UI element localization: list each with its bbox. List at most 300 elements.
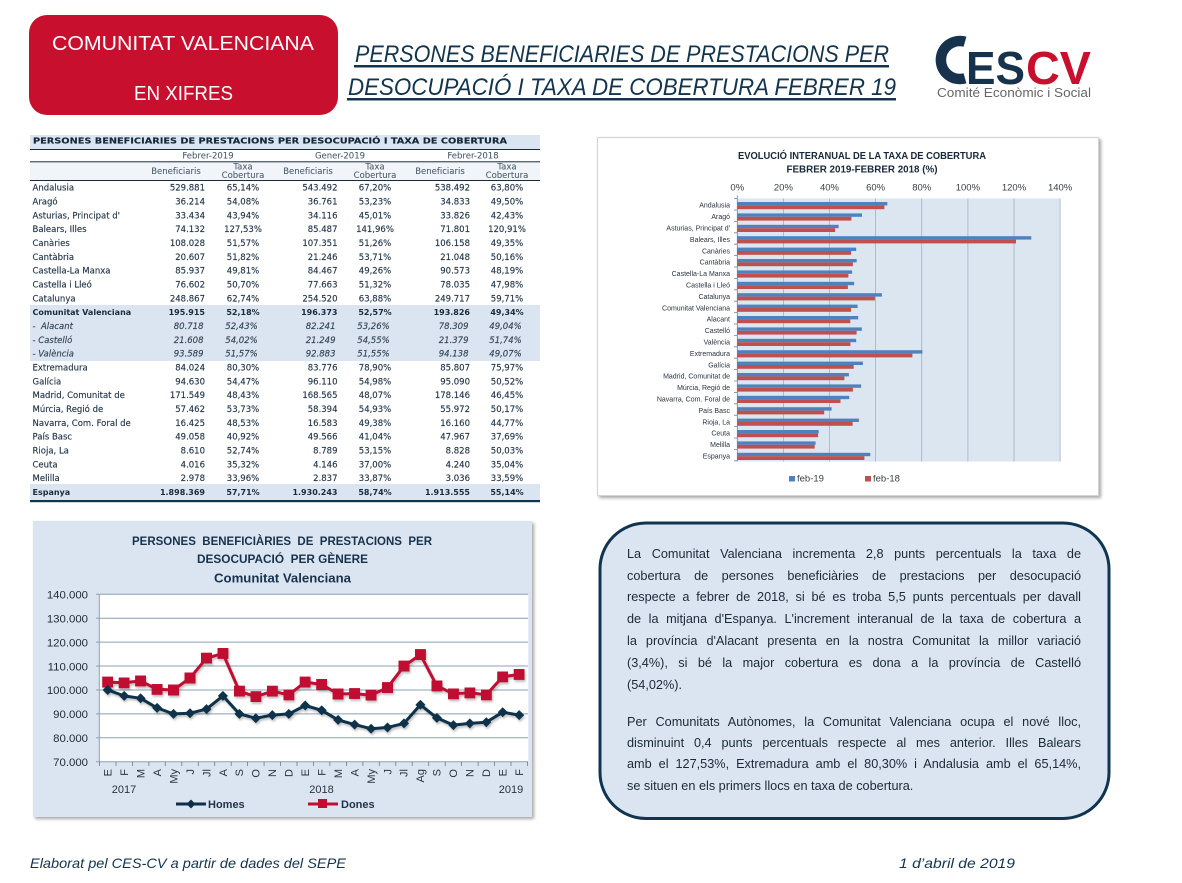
row: Rioja: 52,74% xyxy=(227,446,259,456)
row: Castella i Lleó xyxy=(32,280,523,290)
row: Castella-La Manxa: 90.573 xyxy=(440,267,470,277)
logo: CESCV: ES xyxy=(966,42,1025,94)
row: València: 92.883 xyxy=(306,350,336,360)
month labels: F xyxy=(119,769,131,776)
row: Ceuta: 4.016 xyxy=(181,460,205,470)
row: Asturias: Asturias, Principat d' xyxy=(32,211,120,221)
row: Comunitat Valenciana: 52,57% xyxy=(358,308,392,317)
row: Andalusia: 543.492 xyxy=(302,184,338,194)
table column headers: Taxa xyxy=(496,162,517,172)
row: Canàries: 51,26% xyxy=(359,239,391,249)
row: Canàries: 49,35% xyxy=(491,239,523,249)
paragraph 2: disminuint 0,4 punts percentuals respecte al mes anterior. Illes Balears xyxy=(627,736,1081,750)
row: Alacant xyxy=(32,322,522,332)
logo: CESCV xyxy=(937,41,1091,100)
row: Espanya xyxy=(32,488,524,497)
row: Cantàbria: Cantàbria xyxy=(32,253,74,263)
y axis labels: 100.000 xyxy=(47,685,88,697)
row: Melilla: 2.837 xyxy=(313,474,338,484)
year labels xyxy=(112,784,523,796)
row: País Basc: 40,92% xyxy=(227,433,259,443)
month labels: A xyxy=(152,768,164,776)
table column headers: Cobertura xyxy=(354,171,396,181)
row: Rioja: Rioja, La xyxy=(32,446,69,456)
row: País Basc: 37,69% xyxy=(491,433,523,443)
row: Múrcia: 50,17% xyxy=(491,405,523,415)
row: Galícia: Galícia xyxy=(32,377,61,387)
row: Navarra: 48,53% xyxy=(227,419,259,429)
panel: commentary background xyxy=(600,523,1109,818)
table column headers: Beneficiaris xyxy=(415,167,465,177)
row: Aragó xyxy=(32,196,523,208)
row: Ceuta xyxy=(32,460,523,470)
month labels: D xyxy=(284,769,296,777)
main title xyxy=(347,41,896,101)
row: Aragó: 54,08% xyxy=(227,198,259,208)
row: Navarra: Navarra, Com. Foral de xyxy=(32,419,131,429)
percent axis labels: 80% xyxy=(912,182,932,194)
row: València: 49,07% xyxy=(489,350,522,360)
region labels: Espanya xyxy=(703,454,730,460)
table bottom rule xyxy=(30,500,540,502)
row: Rioja: 53,15% xyxy=(359,446,391,456)
paragraph 1: (54,02%). xyxy=(627,678,682,692)
footer: source: Elaborat pel CES-CV a partir de dades del SEPE xyxy=(30,855,347,871)
region labels xyxy=(657,203,730,460)
row: Castella i Lleó: 51,32% xyxy=(359,280,391,290)
highlight band: Comunitat Valenciana xyxy=(30,305,540,361)
month labels: N xyxy=(464,769,476,777)
row: Castella i Lleó: Castella i Lleó xyxy=(32,280,92,290)
row: Balears: 141,96% xyxy=(356,225,394,235)
row: Castelló: 21.608 xyxy=(174,336,204,346)
row: Múrcia: 58.394 xyxy=(308,405,338,415)
row: Canàries xyxy=(32,239,523,249)
month labels: Jl xyxy=(398,769,410,777)
row: València: 51,57% xyxy=(225,350,258,360)
percent axis labels xyxy=(730,182,1073,194)
month labels: J xyxy=(185,769,197,774)
row: Castella i Lleó: 77.663 xyxy=(308,280,338,290)
row: Castella-La Manxa xyxy=(32,267,523,277)
row: Madrid: 171.549 xyxy=(170,391,205,401)
row: Múrcia: 57.462 xyxy=(175,405,205,415)
paragraph 1: la província d'Alacant presenta en la nostra Comunitat la millor variació xyxy=(627,634,1081,648)
row: Andalusia: 529.881 xyxy=(170,184,205,194)
row: Andalusia: 538.492 xyxy=(435,184,470,194)
month labels: A xyxy=(218,768,230,776)
row: Madrid: 46,45% xyxy=(491,391,523,401)
paragraph 1 xyxy=(627,547,1082,692)
table column headers: Taxa xyxy=(364,162,385,172)
row: Rioja: 8.789 xyxy=(313,446,338,456)
month labels xyxy=(102,768,526,784)
row: Aragó: 34.833 xyxy=(440,198,470,208)
row: Madrid: 48,07% xyxy=(359,391,391,401)
row: País Basc xyxy=(32,433,523,443)
highlight band: Espanya xyxy=(30,484,540,500)
region labels: Aragó xyxy=(711,214,730,221)
badge: Comunitat Valenciana en xifres: COMUNITAT VALENCIANA xyxy=(52,32,314,55)
row: Andalusia: 63,80% xyxy=(491,184,523,194)
row: Canàries: 51,57% xyxy=(227,239,259,249)
percent axis labels: 20% xyxy=(774,182,793,194)
row: Aragó: 36.214 xyxy=(175,198,205,208)
row: Ceuta: Ceuta xyxy=(32,460,58,470)
row: Madrid: Madrid, Comunitat de xyxy=(32,391,125,401)
row: Catalunya: 249.717 xyxy=(435,294,470,304)
table column headers xyxy=(30,149,540,181)
row: Andalusia xyxy=(32,184,523,194)
row: Extremadura: 83.776 xyxy=(308,364,338,374)
table column headers: Taxa xyxy=(232,162,253,172)
table column headers: Febrer-2018 xyxy=(447,152,499,162)
logo: CESCV: CV xyxy=(1026,42,1091,94)
region labels: Asturias, Principat d' xyxy=(666,226,730,232)
row: València: - València xyxy=(32,349,74,360)
row: Extremadura: 75,97% xyxy=(491,364,523,374)
row: Castella-La Manxa: Castella-La Manxa xyxy=(32,267,110,277)
row: Ceuta: 35,32% xyxy=(227,460,259,470)
row: Asturias: 34.116 xyxy=(308,211,338,221)
row: Canàries: 108.028 xyxy=(170,239,205,249)
row: Navarra: 16.425 xyxy=(175,419,205,429)
table title band xyxy=(30,134,540,149)
row: Castelló: 51,74% xyxy=(489,336,522,346)
row: Cantàbria: 51,82% xyxy=(227,253,259,263)
paragraph 1: de la mitjana d'Espanya. L'increment interanual de la taxa de cobertura a xyxy=(627,612,1081,626)
line chart legend: Homes xyxy=(208,799,245,811)
row: Castella-La Manxa: 84.467 xyxy=(308,267,338,277)
row: Navarra: 49,38% xyxy=(359,419,391,429)
row: Comunitat Valenciana: 193.826 xyxy=(434,308,470,317)
row: Asturias: 42,43% xyxy=(491,211,523,221)
line chart title: DESOCUPACIÓ PER GÈNERE xyxy=(197,551,368,566)
region labels: Múrcia, Regió de xyxy=(677,385,730,392)
region labels: Castelló xyxy=(705,328,730,335)
row: Galícia: 54,98% xyxy=(359,377,391,387)
row: Ceuta: 37,00% xyxy=(359,460,391,470)
main title: DESOCUPACIÓ I TAXA DE COBERTURA FEBRER 19 xyxy=(348,74,896,101)
month labels: Jl xyxy=(202,769,214,777)
row: Navarra: 16.160 xyxy=(440,419,470,429)
row: Cantàbria: 20.607 xyxy=(175,253,205,263)
region labels: València xyxy=(704,340,730,346)
row: Madrid: 178.146 xyxy=(435,391,470,401)
row: Espanya: 57,71% xyxy=(226,488,260,497)
row: Melilla: 2.978 xyxy=(181,474,205,484)
row: Castella-La Manxa: 49,26% xyxy=(359,267,391,277)
panel: line chart by gender xyxy=(33,521,532,817)
row: País Basc: 41,04% xyxy=(359,433,391,443)
region labels: Balears, Illes xyxy=(690,237,730,244)
year labels: 2017 xyxy=(112,784,136,796)
table column headers: Beneficiaris xyxy=(283,167,333,177)
month labels: Ag xyxy=(415,769,427,782)
row: Andalusia: Andalusia xyxy=(32,184,74,194)
row: Alacant: 82.241 xyxy=(306,322,336,332)
row: Castelló xyxy=(32,335,522,346)
row: Alacant: 80.718 xyxy=(174,322,204,332)
month labels: E xyxy=(102,769,114,776)
paragraph 2: se situen en els primers llocs en taxa de cobertura. xyxy=(627,779,913,793)
percent axis labels: 60% xyxy=(866,182,886,194)
row: Navarra: 44,77% xyxy=(491,419,523,429)
row: Navarra: 16.583 xyxy=(308,419,338,429)
row: Balears: 74.132 xyxy=(175,225,205,235)
table column headers: Beneficiaris xyxy=(151,167,201,177)
row: Catalunya: 63,88% xyxy=(359,294,391,304)
month labels: O xyxy=(250,769,262,778)
row: Catalunya xyxy=(32,294,523,304)
line chart title: PERSONES BENEFICIÀRIES DE PRESTACIONS PER xyxy=(132,533,432,548)
region labels: Rioja, La xyxy=(702,419,730,426)
month labels: D xyxy=(481,769,493,777)
y axis labels: 130.000 xyxy=(47,614,88,626)
region labels: Madrid, Comunitat de xyxy=(663,374,730,381)
line chart title xyxy=(132,533,432,586)
row: Catalunya: 59,71% xyxy=(491,294,523,304)
row: Galícia: 50,52% xyxy=(491,377,523,387)
row: Galícia: 95.090 xyxy=(440,377,470,387)
bar chart legend: feb-19 xyxy=(797,474,824,484)
percent axis labels: 120% xyxy=(1002,182,1027,194)
row: Balears: Balears, Illes xyxy=(32,225,87,235)
month labels: My xyxy=(168,769,180,784)
row: Comunitat Valenciana xyxy=(32,308,524,317)
row: Catalunya: Catalunya xyxy=(32,294,76,304)
y axis labels: 120.000 xyxy=(47,638,88,650)
row: Ceuta: 4.146 xyxy=(313,460,338,470)
percent axis labels: 140% xyxy=(1048,182,1073,194)
row: Asturias: 45,01% xyxy=(359,211,391,221)
row: Comunitat Valenciana: 195.915 xyxy=(169,308,205,317)
row: Castella-La Manxa: 49,81% xyxy=(227,267,259,277)
row: Asturias: 33.434 xyxy=(175,211,205,221)
row: Rioja: 8.828 xyxy=(446,446,470,456)
row: Navarra xyxy=(32,419,523,429)
month labels: M xyxy=(333,769,345,778)
row: Comunitat Valenciana: 52,18% xyxy=(226,308,260,317)
month labels: E xyxy=(300,769,312,776)
row: Extremadura: 84.024 xyxy=(175,364,205,374)
row: Melilla: 33,87% xyxy=(359,474,391,484)
row: Cantàbria: 21.246 xyxy=(308,253,338,263)
row: Balears: 127,53% xyxy=(224,225,262,235)
row: Canàries: 106.158 xyxy=(435,239,470,249)
main title: PERSONES BENEFICIARIES DE PRESTACIONS PER xyxy=(355,41,889,68)
month labels: N xyxy=(267,769,279,777)
row: País Basc: 49.566 xyxy=(308,433,338,443)
row: Espanya: 1.913.555 xyxy=(425,488,470,497)
table column headers: Febrer-2019 xyxy=(182,152,234,162)
month labels: S xyxy=(234,769,246,776)
row: Extremadura: 80,30% xyxy=(227,364,259,374)
row: Cantàbria: 53,71% xyxy=(359,253,391,263)
region labels: País Basc xyxy=(698,408,730,415)
row: Aragó: 49,50% xyxy=(491,198,523,208)
row: Castelló: 21.379 xyxy=(439,336,468,346)
region labels: Castella-La Manxa xyxy=(672,271,730,278)
row: Castella i Lleó: 76.602 xyxy=(175,280,205,290)
row: València: 51,55% xyxy=(357,350,390,360)
row: Extremadura xyxy=(32,364,523,374)
row: Rioja: 50,03% xyxy=(491,446,523,456)
plot background and grid xyxy=(734,196,1060,462)
row: Castella-La Manxa: 85.937 xyxy=(175,267,205,277)
row: Melilla xyxy=(32,474,523,484)
row: Balears: 120,91% xyxy=(488,225,526,235)
region labels: Comunitat Valenciana xyxy=(662,305,730,312)
row: Espanya: 1.930.243 xyxy=(292,488,338,497)
region labels: Extremadura xyxy=(690,351,730,358)
region labels: Navarra, Com. Foral de xyxy=(657,396,730,404)
row: Asturias: 33.826 xyxy=(440,211,470,221)
row: Madrid: 48,43% xyxy=(227,391,259,401)
row: País Basc: País Basc xyxy=(32,433,72,443)
month labels: M xyxy=(136,769,148,778)
row: Andalusia: 67,20% xyxy=(359,184,391,194)
row: País Basc: 49.058 xyxy=(175,433,205,443)
row: Extremadura: 78,90% xyxy=(359,364,391,374)
region labels: Castella i Lleó xyxy=(686,282,730,290)
line chart legend: Dones xyxy=(341,799,375,811)
row: Aragó: 53,23% xyxy=(359,198,391,208)
panel: bar chart of coverage rate xyxy=(598,138,1098,496)
bar chart title xyxy=(738,150,986,176)
row: Múrcia: 54,93% xyxy=(359,405,391,415)
row: Balears xyxy=(32,225,526,235)
row: Ceuta: 35,04% xyxy=(491,460,523,470)
row: Espanya: 1.898.369 xyxy=(160,488,205,497)
row: Balears: 71.801 xyxy=(440,225,470,235)
line: Homes xyxy=(108,690,519,729)
badge: Comunitat Valenciana en xifres: EN XIFRES xyxy=(134,82,233,105)
paragraph 1: cobertura de persones beneficiàries de prestacions per desocupació xyxy=(627,569,1081,583)
row: Castella i Lleó: 50,70% xyxy=(227,280,259,290)
row: Extremadura: 85.807 xyxy=(440,364,470,374)
row: Comunitat Valenciana: 196.373 xyxy=(301,308,338,317)
row: Galícia xyxy=(32,377,523,387)
row: Madrid xyxy=(32,391,523,401)
row: Extremadura: Extremadura xyxy=(32,364,88,374)
month labels: F xyxy=(316,769,328,776)
line chart legend xyxy=(176,799,375,811)
bars: feb-18 xyxy=(737,205,1016,460)
row: Canàries: Canàries xyxy=(32,239,70,249)
paragraph 2: amb el 127,53%, Extremadura amb el 80,30% i Andalusia amb el 65,14%, xyxy=(627,757,1081,771)
row: Múrcia: Múrcia, Regió de xyxy=(32,404,103,415)
row: Catalunya: 254.520 xyxy=(302,294,338,304)
row: Rioja xyxy=(32,446,523,456)
paragraph 2: Per Comunitats Autònomes, la Comunitat Valenciana ocupa el nové lloc, xyxy=(627,715,1081,729)
row: Catalunya: 62,74% xyxy=(227,294,259,304)
row: Múrcia xyxy=(32,404,523,415)
month labels: O xyxy=(448,769,460,778)
bar chart title: FEBRER 2019-FEBRER 2018 (%) xyxy=(786,164,938,176)
row: Comunitat Valenciana: Comunitat Valenciana xyxy=(32,308,131,317)
row: Aragó: 36.761 xyxy=(308,198,338,208)
row: Castella-La Manxa: 48,19% xyxy=(491,267,523,277)
row: Castelló: 54,55% xyxy=(357,336,390,346)
row: Galícia: 54,47% xyxy=(227,377,259,387)
month labels: A xyxy=(350,768,362,776)
row: Melilla: 33,96% xyxy=(227,474,259,484)
bar chart title: EVOLUCIÓ INTERANUAL DE LA TAXA DE COBERTURA xyxy=(738,150,986,162)
row: Alacant: - Alacant xyxy=(32,322,74,332)
row: Alacant: 52,43% xyxy=(225,322,258,332)
month labels: S xyxy=(432,769,444,776)
commentary text xyxy=(627,547,1082,793)
bar chart legend xyxy=(789,474,900,484)
row: Comunitat Valenciana: 49,34% xyxy=(490,308,524,317)
row: Espanya: Espanya xyxy=(32,488,70,497)
plot area and grid xyxy=(96,594,528,766)
row: Espanya: 58,74% xyxy=(358,488,392,497)
row: Madrid: 168.565 xyxy=(302,391,338,401)
line: Dones xyxy=(108,653,519,697)
row: Galícia: 94.630 xyxy=(175,377,205,387)
region labels: Canàries xyxy=(702,248,730,255)
row: Asturias: 43,94% xyxy=(227,211,259,221)
row: Melilla: 33,59% xyxy=(491,474,523,484)
row: Castelló: 54,02% xyxy=(225,336,258,346)
row: Andalusia: 65,14% xyxy=(227,184,259,194)
row: Rioja: 8.610 xyxy=(181,446,205,456)
row: Melilla: Melilla xyxy=(32,474,60,484)
month labels: F xyxy=(514,769,526,776)
paragraph 1: respecte a febrer de 2018, si bé es troba 5,5 punts percentuals per davall xyxy=(627,590,1081,604)
row: Catalunya: 248.867 xyxy=(170,294,205,304)
table title band: PERSONES BENEFICIARIES DE PRESTACIONS PER DESOCUPACIÓ I TAXA DE COBERTURA xyxy=(33,134,508,146)
percent axis labels: 0% xyxy=(730,182,745,194)
row: Castelló: 21.249 xyxy=(306,336,336,346)
row: Castella i Lleó: 47,98% xyxy=(491,280,523,290)
y axis labels: 70.000 xyxy=(53,757,88,769)
row: Alacant: 49,04% xyxy=(489,322,522,332)
line chart title: Comunitat Valenciana xyxy=(214,572,352,586)
month labels: J xyxy=(382,769,394,774)
month labels: E xyxy=(498,769,510,776)
region labels: Alacant xyxy=(707,317,730,324)
bars: feb-19 xyxy=(737,202,1031,456)
row: Galícia: 96.110 xyxy=(308,377,338,387)
percent axis labels: 100% xyxy=(956,182,981,194)
row: País Basc: 47.967 xyxy=(440,433,470,443)
y axis labels xyxy=(47,590,88,769)
region labels: Cantàbria xyxy=(700,260,730,267)
row: València: 93.589 xyxy=(174,350,204,360)
table column headers: Cobertura xyxy=(486,171,528,181)
row: Espanya: 55,14% xyxy=(490,488,524,497)
row: València: 94.138 xyxy=(439,350,469,360)
row: Múrcia: 53,73% xyxy=(227,405,259,415)
paragraph 1: (3,4%), si bé la major cobertura es dona a la província de Castelló xyxy=(627,656,1081,670)
row: Cantàbria: 50,16% xyxy=(491,253,523,263)
row: Múrcia: 55.972 xyxy=(440,405,470,415)
region labels: Galícia xyxy=(708,362,730,369)
row: Castella i Lleó: 78.035 xyxy=(440,280,470,290)
row: Melilla: 3.036 xyxy=(446,474,470,484)
row: Castelló: - Castelló xyxy=(32,335,72,346)
row: València xyxy=(32,349,522,360)
y axis labels: 90.000 xyxy=(53,709,88,721)
footer: date: 1 d’abril de 2019 xyxy=(899,855,1015,871)
badge: Comunitat Valenciana en xifres xyxy=(29,15,338,115)
paragraph 2 xyxy=(627,715,1081,793)
percent axis labels: 40% xyxy=(820,182,840,194)
region labels: Ceuta xyxy=(711,431,730,438)
